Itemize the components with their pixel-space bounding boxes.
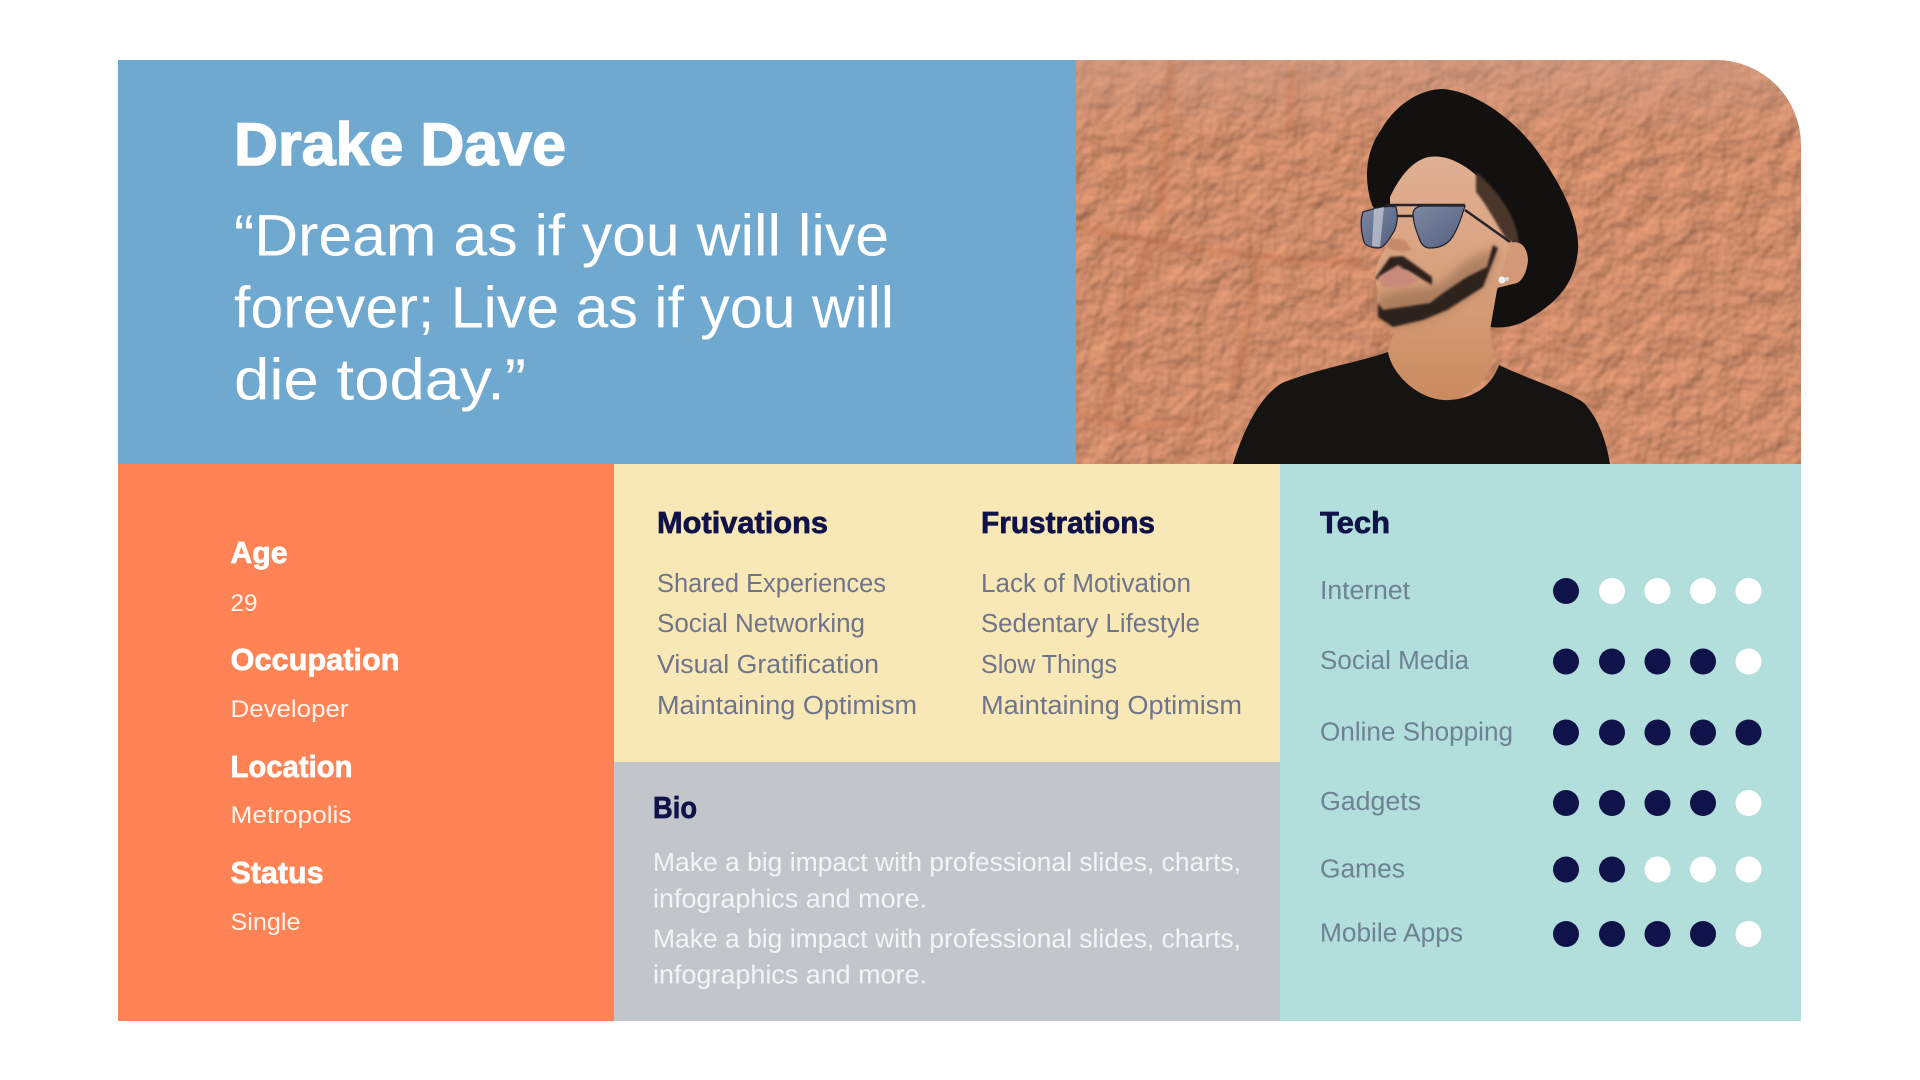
- tech heading: Tech: [1320, 505, 1390, 540]
- rating: mobile apps: [1320, 920, 1762, 948]
- rating: social media: [1320, 647, 1762, 675]
- bio text: Make a big impact with professional slides, charts,: [653, 926, 1241, 954]
- bio text: Make a big impact with professional slides, charts,: [653, 849, 1241, 877]
- photo: man with hat and sunglasses against a terracotta wall: [1076, 60, 1801, 464]
- panel: tech ratings: [1280, 464, 1801, 1021]
- occupation: Occupation: [230, 642, 400, 677]
- quote text: “Dream as if you will live: [234, 204, 889, 268]
- location: Location: [230, 749, 352, 784]
- panel: motivations and frustrations: [614, 464, 1280, 762]
- rating: mobile apps: Mobile Apps: [1320, 920, 1463, 948]
- status: Single: [230, 909, 300, 936]
- age: 29: [230, 590, 258, 617]
- rating: gadgets: [1320, 788, 1762, 816]
- status: [230, 855, 324, 936]
- rating: games: Games: [1320, 856, 1405, 884]
- occupation: Developer: [230, 696, 348, 723]
- frustrations list: [981, 505, 1242, 720]
- panel: name and quote: [118, 60, 1076, 464]
- age: [230, 535, 288, 617]
- frustrations list: Lack of Motivation: [981, 570, 1191, 598]
- rating: games: [1320, 856, 1762, 884]
- bio text: [653, 849, 1241, 990]
- panel: bio: [614, 762, 1280, 1021]
- motivations list: Shared Experiences: [657, 570, 886, 598]
- location: [230, 749, 352, 829]
- quote text: forever; Live as if you will: [234, 276, 894, 340]
- quote text: [234, 204, 894, 412]
- frustrations list: Frustrations: [981, 505, 1155, 540]
- status: Status: [230, 855, 324, 890]
- bio heading: Bio: [653, 790, 697, 825]
- rating: social media: Social Media: [1320, 647, 1470, 675]
- age: Age: [230, 535, 288, 570]
- motivations list: Social Networking: [657, 610, 865, 638]
- rating: gadgets: Gadgets: [1320, 788, 1421, 816]
- frustrations list: Sedentary Lifestyle: [981, 610, 1200, 638]
- rating: online shopping: [1320, 718, 1762, 746]
- motivations list: Visual Gratification: [657, 651, 879, 679]
- title: name: Drake Dave: [234, 111, 566, 178]
- panel: demographics: [118, 464, 614, 1021]
- location: Metropolis: [230, 802, 352, 829]
- frustrations list: Slow Things: [981, 651, 1117, 679]
- frustrations list: Maintaining Optimism: [981, 692, 1242, 720]
- motivations list: Maintaining Optimism: [657, 692, 917, 720]
- rating: internet: Internet: [1320, 577, 1410, 605]
- bio text: infographics and more.: [653, 962, 927, 990]
- quote text: die today.”: [234, 348, 526, 412]
- rating: internet: [1320, 577, 1762, 605]
- bio text: infographics and more.: [653, 886, 927, 914]
- motivations list: Motivations: [657, 505, 828, 540]
- occupation: [230, 642, 400, 723]
- motivations list: [657, 505, 917, 720]
- rating: online shopping: Online Shopping: [1320, 718, 1513, 746]
